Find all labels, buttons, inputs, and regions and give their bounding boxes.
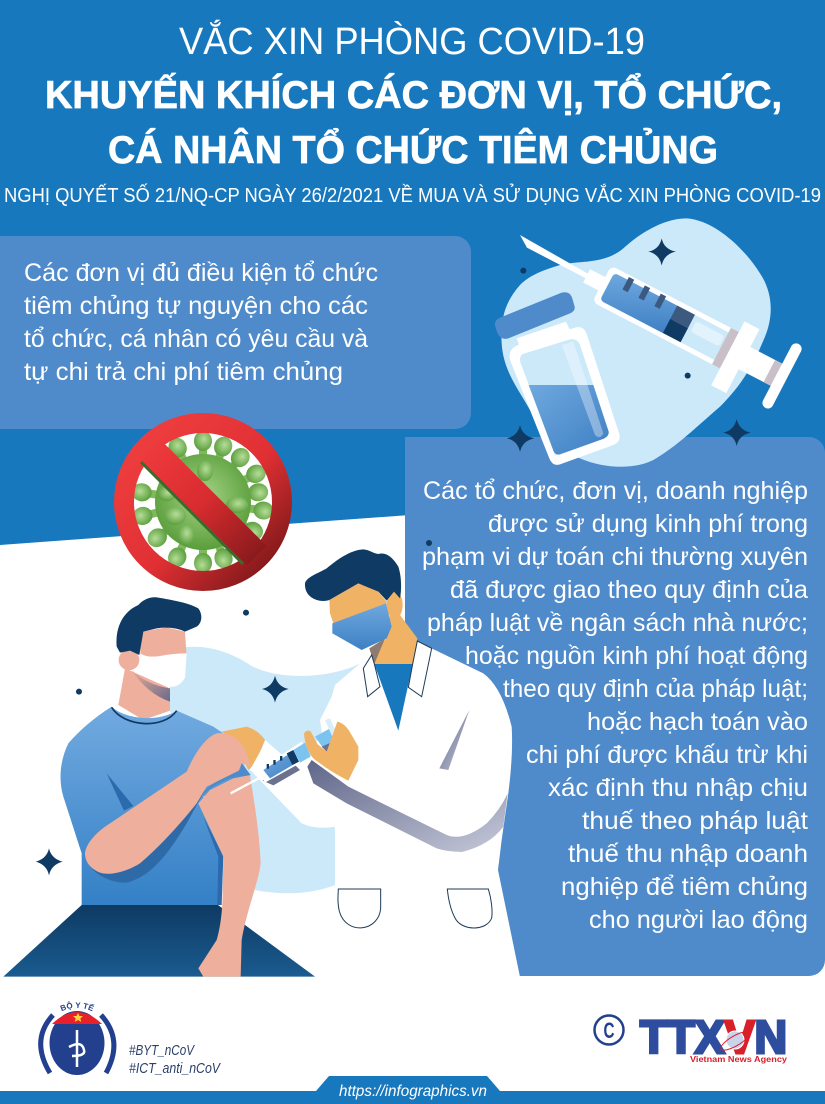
panel text: funding sources: Các tổ chức, đơn vị, doanh nghiệp: [423, 477, 808, 505]
panel: funding background: [405, 437, 825, 976]
agency tagline: Vietnam News Agency: [690, 1054, 787, 1064]
syringe barrel light: [293, 743, 311, 763]
patient lower arm: [198, 775, 261, 977]
decorative stars and dots: [36, 610, 249, 875]
coat sleeve shadow: [307, 760, 508, 852]
patient shirt: [61, 707, 250, 905]
panel text: funding sources: đã được giao theo quy định của: [450, 576, 808, 604]
logo red cap: [52, 1012, 102, 1024]
panel text: funding sources: xác định thu nhập chịu: [548, 774, 808, 802]
shirt collar: [112, 707, 177, 724]
icon: vial: [495, 292, 620, 465]
prohibition bar: [139, 438, 267, 566]
coat fold: [439, 710, 469, 770]
title line 2: KHUYẾN KHÍCH CÁC ĐƠN VỊ, TỔ CHỨC,: [45, 72, 782, 117]
background: blue header band: [0, 0, 825, 560]
syringe plunger: [287, 750, 299, 765]
copyright symbol: [594, 1016, 624, 1044]
panel text: funding sources: chi phí được khấu trừ khi: [526, 741, 808, 769]
shirt fold: [107, 773, 133, 811]
needle: [231, 777, 261, 793]
illustration: syringe and vial: [495, 207, 804, 467]
shirt sleeve: [203, 763, 251, 794]
title line 3: CÁ NHÂN TỔ CHỨC TIÊM CHỦNG: [108, 127, 718, 172]
title block: [4, 19, 821, 207]
icon: no-virus badge: [124, 423, 282, 581]
illustration: patient: [3, 597, 315, 977]
light blue blob: [501, 218, 771, 467]
globe: [719, 1029, 751, 1053]
hashtags: [129, 1042, 222, 1077]
panel text: tiêm chủng tự nguyện cho các: [24, 292, 368, 320]
panel text: funding sources: hoặc nguồn kinh phí hoạt động: [465, 642, 808, 670]
hashtags: #ICT_anti_nCoV: [129, 1060, 222, 1077]
doctor ear: [387, 591, 403, 619]
syringe lower handle: [263, 765, 300, 785]
logo left arc: [41, 1015, 53, 1073]
doctor mask: [332, 603, 392, 650]
logo right arc: [101, 1015, 114, 1073]
panel text: funding sources: thuế theo pháp luật: [582, 807, 808, 835]
patient ear: [119, 650, 139, 670]
backdrop: light blue swoosh: [170, 647, 363, 893]
logo star: [73, 1013, 83, 1022]
decorative stars and dots: [507, 238, 751, 452]
patient mask: [140, 653, 187, 687]
logo text: BỘ Y TẾ: [60, 1001, 94, 1012]
panel: voluntary vaccination: [0, 236, 471, 429]
ticks: [267, 756, 282, 769]
logo staff and serpent: [69, 1030, 84, 1067]
panel text: tổ chức, cá nhân có yêu cầu và: [24, 325, 368, 353]
neck shadow: [132, 670, 170, 702]
syringe rear: [315, 728, 336, 748]
panel background: [0, 236, 471, 429]
dot over funding panel: [426, 540, 432, 546]
neck shadow: [369, 638, 385, 664]
copyright symbol: C: [604, 1018, 615, 1043]
panel text: funding sources: thuế thu nhập doanh: [568, 840, 808, 868]
doctor face: [329, 583, 387, 623]
prohibition ring: [124, 423, 282, 581]
syringe barrel outline: [258, 742, 311, 783]
footer tab: [316, 1076, 500, 1091]
decorative stars and dots: [262, 676, 289, 703]
syringe liquid: [263, 753, 298, 778]
table: [3, 905, 315, 977]
panel text: funding sources: được sử dụng kinh phí trong: [488, 510, 808, 538]
background: white lower area: [0, 515, 825, 1104]
panel text: funding sources: [422, 477, 808, 934]
footer url: https://infographics.vn: [339, 1083, 487, 1100]
badge white inside: [131, 430, 275, 574]
logo shield: [50, 1011, 104, 1075]
panel text: tự chi trả chi phí tiêm chủng: [24, 358, 343, 386]
bar shadow: [140, 460, 245, 565]
patient face: [140, 627, 187, 657]
patient hair: [116, 597, 201, 655]
doctor tie V: [374, 664, 413, 731]
hashtags: #BYT_nCoV: [129, 1042, 196, 1059]
footer bar: [0, 1076, 825, 1104]
cuff: [250, 741, 287, 783]
title line 1: VẮC XIN PHÒNG COVID-19: [179, 19, 645, 63]
panel text: funding sources: hoặc hạch toán vào: [587, 708, 808, 736]
shirt side shadow: [203, 817, 223, 905]
icon: syringe: [499, 207, 804, 415]
doctor hair: [305, 549, 401, 601]
patient arm shadow: [85, 790, 205, 883]
patient neck: [118, 668, 170, 720]
panel text: funding sources: nghiệp để tiêm chủng: [561, 873, 808, 901]
doctor neck: [369, 612, 417, 664]
logo: TTXVN: [594, 1011, 787, 1064]
illustration: syringe and doctor hand: [231, 676, 358, 793]
doctor hand on shoulder: [222, 727, 265, 770]
panel text: funding sources: pháp luật về ngân sách nhà nước;: [427, 609, 808, 637]
panel text: funding sources: phạm vi dự toán chi thường xuyên: [422, 543, 808, 571]
panel text: Các đơn vị đủ điều kiện tổ chức: [24, 259, 378, 287]
logo: Bộ Y tế: [38, 1001, 116, 1075]
panel text: funding sources: theo quy định của pháp luật;: [503, 675, 808, 703]
patient raised arm: [85, 733, 250, 874]
doctor coat: [253, 648, 520, 977]
panel text: [24, 259, 378, 386]
coat pockets: [338, 889, 492, 928]
virus: [130, 431, 275, 573]
doctor collar: [363, 641, 432, 697]
doctor hand: [304, 722, 358, 781]
illustration: doctor: [253, 549, 520, 977]
panel text: funding sources: cho người lao động: [589, 906, 808, 934]
TTXVN wordmark: TTXVN: [640, 1011, 787, 1063]
